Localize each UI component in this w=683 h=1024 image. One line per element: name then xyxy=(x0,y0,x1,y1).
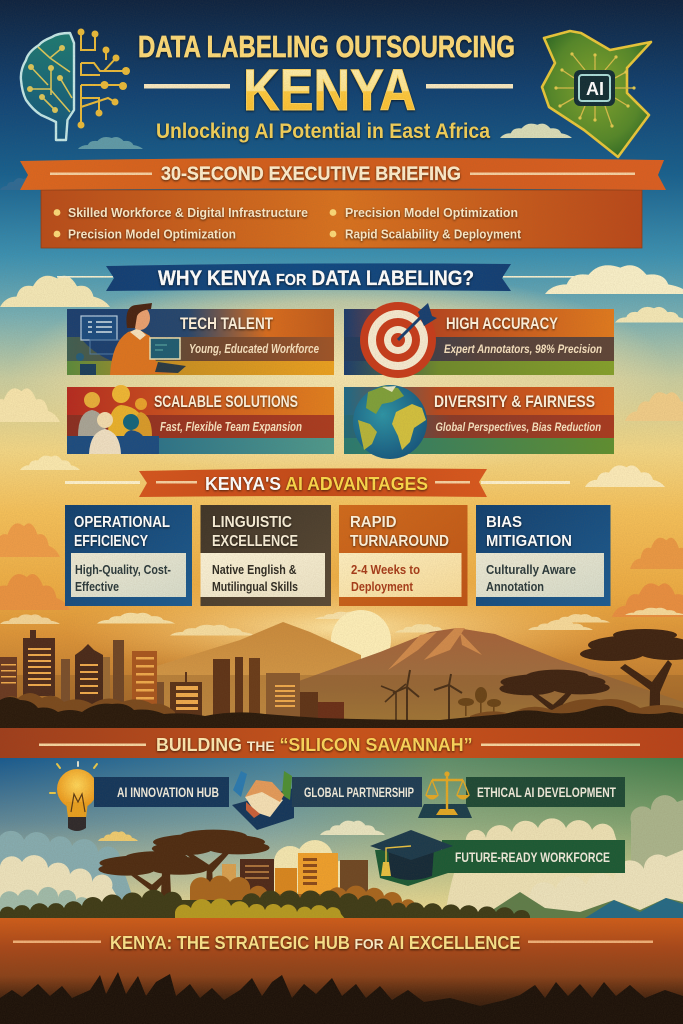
briefing bullets xyxy=(54,209,336,237)
tech talent title: TECH TALENT xyxy=(180,315,273,333)
description: Deployment xyxy=(351,579,414,594)
sky glow xyxy=(11,270,671,480)
bushes: yellow layer xyxy=(175,898,346,920)
sun xyxy=(331,610,391,670)
lower haze xyxy=(0,675,683,727)
band: building the Silicon Savannah xyxy=(0,728,683,758)
description: Mutilingual Skills xyxy=(212,579,298,594)
card: rapid turnaround xyxy=(339,505,468,606)
high accuracy description: Expert Annotators, 98% Precision xyxy=(444,342,602,356)
scalable solutions description: Fast, Flexible Team Expansion xyxy=(160,420,302,434)
icon: Kenya map with AI chip xyxy=(542,31,651,157)
description: High-Quality, Cost- xyxy=(75,562,171,577)
icon: scales of justice xyxy=(418,771,472,818)
description xyxy=(486,562,576,594)
icon: person at laptop xyxy=(110,303,186,375)
pill: future-ready workforce: FUTURE-READY WORKFORCE xyxy=(455,850,610,865)
title side rules xyxy=(144,84,513,88)
title: EFFICIENCY xyxy=(74,533,148,550)
horizon clouds xyxy=(0,608,683,636)
palm trees xyxy=(458,687,501,716)
title word Kenya: KENYA xyxy=(243,58,416,123)
pill: ethical AI development xyxy=(466,777,625,807)
title xyxy=(350,514,449,550)
closing headline: KENYA: THE STRATEGIC HUB FOR AI EXCELLENCE xyxy=(110,933,520,953)
briefing list: Skilled Workforce & Digital Infrastructure xyxy=(68,205,308,220)
high accuracy title: HIGH ACCURACY xyxy=(446,315,558,333)
title: OPERATIONAL xyxy=(74,514,170,531)
acacia trees xyxy=(98,830,269,918)
card: high accuracy xyxy=(344,302,614,378)
card: operational efficiency xyxy=(65,505,192,606)
description: Native English & xyxy=(212,562,296,577)
section: AI advantages heading xyxy=(65,468,570,497)
briefing list: Rapid Scalability & Deployment xyxy=(345,226,522,242)
pill: future-ready workforce xyxy=(442,840,625,873)
diversity title: DIVERSITY & FAIRNESS xyxy=(434,393,595,411)
title: RAPID xyxy=(350,514,396,531)
chip label: AI xyxy=(586,79,604,99)
description xyxy=(212,562,298,594)
pill: global partnership: GLOBAL PARTNERSHIP xyxy=(304,785,414,800)
title: TURNAROUND xyxy=(350,533,449,550)
illustration: Nairobi skyline and mountains xyxy=(0,610,683,739)
title: BIAS xyxy=(486,514,522,531)
tech talent description: Young, Educated Workforce xyxy=(189,342,319,356)
title: LINGUISTIC xyxy=(212,514,292,531)
decorative clouds xyxy=(0,124,683,617)
briefing list: Precision Model Optimization xyxy=(345,205,518,220)
description: Effective xyxy=(75,579,119,594)
sun glow xyxy=(65,576,625,680)
icon: graduation cap xyxy=(370,830,453,886)
clouds right xyxy=(445,795,683,918)
band heading: BUILDING THE “SILICON SAVANNAH” xyxy=(156,735,472,755)
card: linguistic excellence xyxy=(200,505,331,606)
bushes: dark olive layer xyxy=(0,890,530,918)
pill: AI innovation hub: AI INNOVATION HUB xyxy=(117,785,219,800)
title line 1: DATA LABELING OUTSOURCING xyxy=(138,29,515,64)
icon: globe xyxy=(353,385,427,459)
title: EXCELLENCE xyxy=(212,533,298,550)
mountain left xyxy=(150,622,361,730)
mountain right xyxy=(296,628,683,730)
description xyxy=(75,562,171,594)
section: why Kenya heading xyxy=(57,263,574,291)
briefing list: Precision Model Optimization xyxy=(68,226,236,242)
foreground silhouettes xyxy=(0,697,683,728)
building windows xyxy=(1,648,295,710)
card: scalable solutions xyxy=(67,385,334,454)
description: 2-4 Weeks to xyxy=(351,562,420,577)
briefing body xyxy=(41,190,642,248)
grass silhouettes xyxy=(0,972,683,1024)
card: bias mitigation xyxy=(476,505,610,606)
title xyxy=(138,29,515,143)
mid-ground bushes xyxy=(0,693,683,728)
title xyxy=(74,514,170,550)
illustration: city and savannah xyxy=(0,830,683,920)
buildings xyxy=(0,630,344,726)
subtitle: Unlocking AI Potential in East Africa xyxy=(156,120,490,143)
icon: team of people xyxy=(67,385,159,454)
icon: light bulb xyxy=(50,762,107,831)
diversity description: Global Perspectives, Bias Reduction xyxy=(436,420,601,434)
pill: global partnership xyxy=(292,777,422,807)
card: diversity and fairness xyxy=(344,385,614,459)
title xyxy=(486,514,572,550)
clouds left xyxy=(0,831,140,918)
title: MITIGATION xyxy=(486,533,572,550)
AI advantages heading text: KENYA'S AI ADVANTAGES xyxy=(205,474,428,494)
clouds centre xyxy=(274,840,354,892)
bushes: back brown layer xyxy=(190,876,416,918)
icon: handshake xyxy=(232,771,294,830)
briefing list xyxy=(68,205,522,242)
distant hills xyxy=(480,892,683,918)
panel: closing banner xyxy=(0,918,683,1024)
icon: monitor xyxy=(81,316,130,354)
panel: executive briefing xyxy=(20,158,666,248)
pill: AI innovation hub xyxy=(94,777,229,807)
description xyxy=(351,562,420,594)
briefing ribbon xyxy=(20,158,666,190)
icon: target xyxy=(360,302,437,378)
wind turbines xyxy=(381,670,462,722)
why Kenya heading text: WHY KENYA FOR DATA LABELING? xyxy=(158,267,474,290)
description: Annotation xyxy=(486,579,544,594)
card: tech talent xyxy=(67,303,334,375)
description: Culturally Aware xyxy=(486,562,576,577)
briefing heading: 30-SECOND EXECUTIVE BRIEFING xyxy=(161,163,461,185)
lower landscape background xyxy=(0,758,683,918)
title xyxy=(212,514,298,550)
icon: brain circuit xyxy=(21,28,130,140)
pill: ethical AI development: ETHICAL AI DEVELOPMENT xyxy=(477,785,617,800)
city buildings xyxy=(222,853,368,899)
scalable solutions title: SCALABLE SOLUTIONS xyxy=(154,393,298,411)
acacia trees xyxy=(499,629,683,739)
